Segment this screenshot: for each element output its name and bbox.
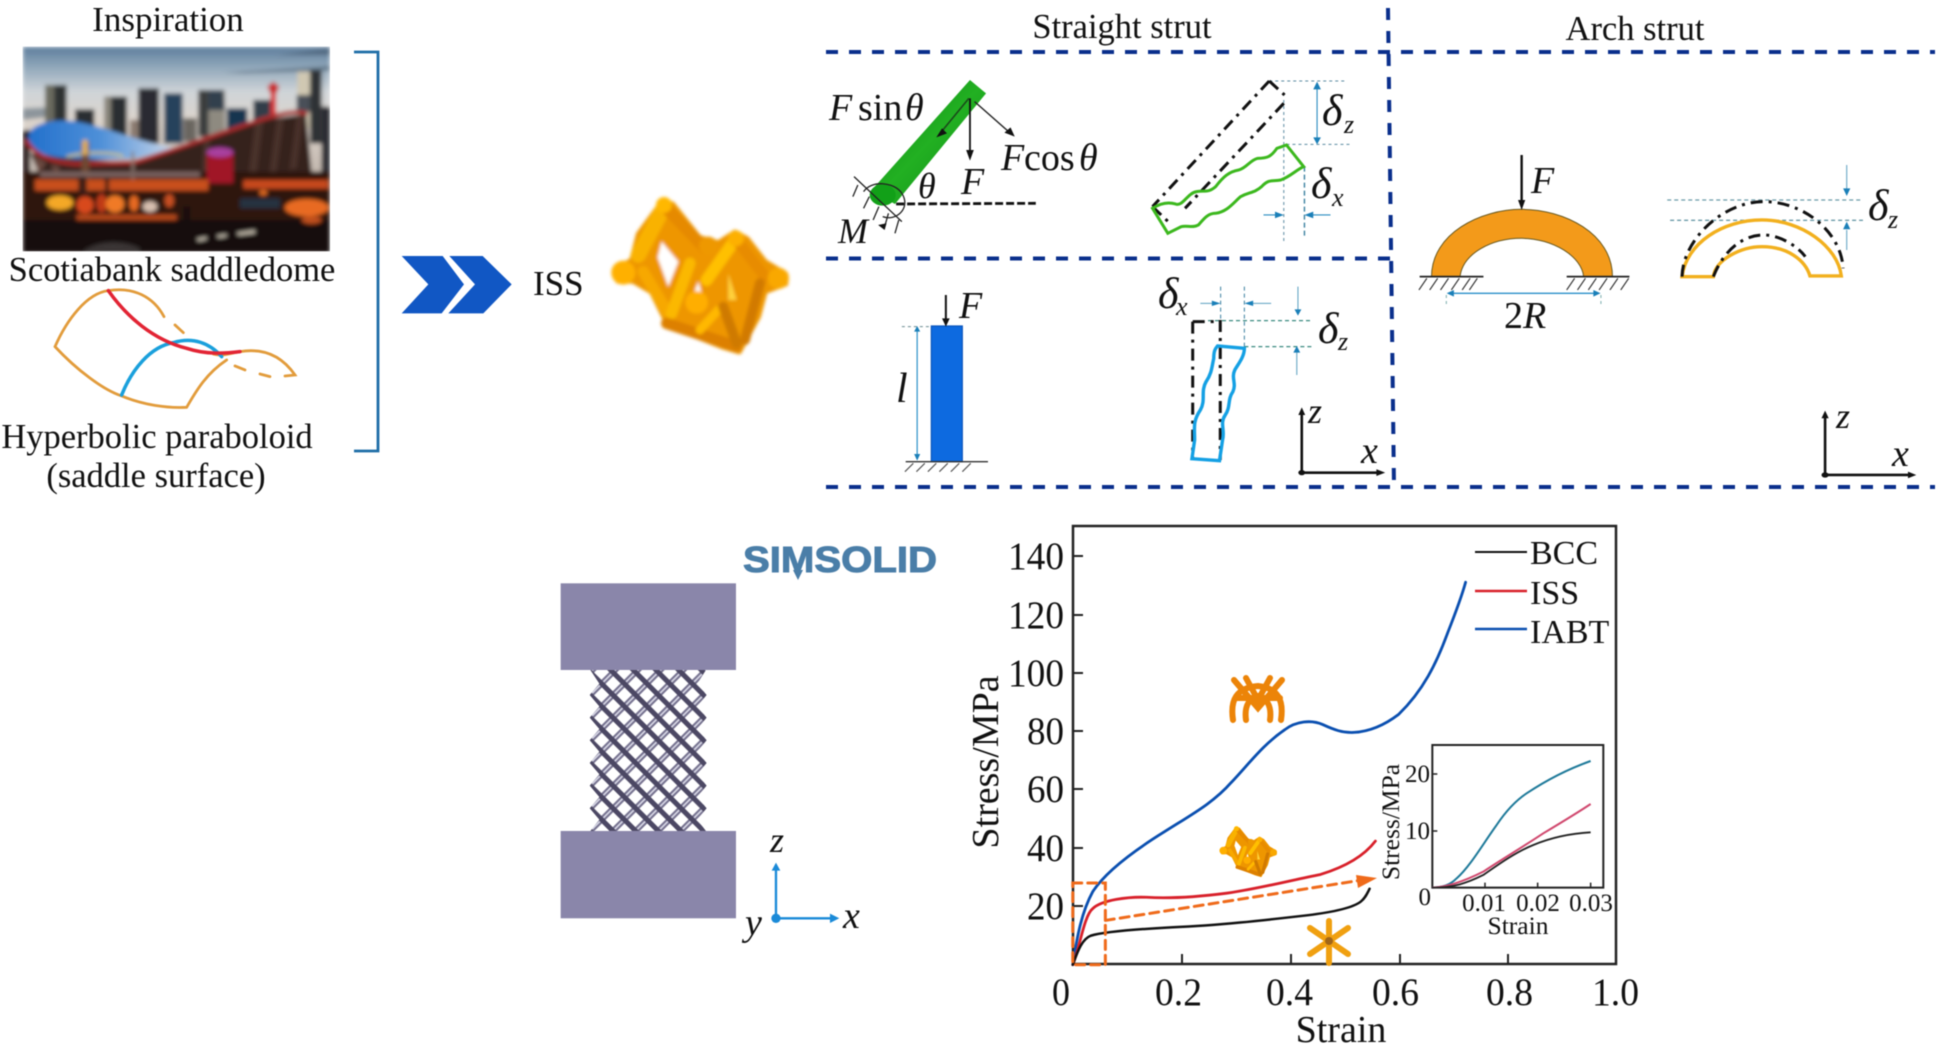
label: F: F	[958, 285, 983, 327]
inset tick labels: 20	[1405, 761, 1430, 788]
inset tick labels: 0	[1418, 884, 1431, 911]
caption: Scotiabank saddledome: Scotiabank saddledome	[9, 251, 335, 289]
diagram: lattice compression simulation	[561, 583, 736, 918]
inset tick labels: 0.03	[1569, 890, 1613, 917]
diagram: blue vertical strut	[902, 295, 988, 472]
inset y title: Stress/MPa	[1376, 764, 1405, 880]
label: F sin theta: F	[828, 87, 853, 129]
diagram: deformed vertical strut	[1192, 287, 1313, 461]
caption: Hyperbolic paraboloid (saddle surface)	[1, 418, 313, 495]
y axis tick labels: 60	[1027, 768, 1064, 811]
label: M: M	[837, 211, 870, 251]
plot frame and ticks	[1073, 526, 1616, 964]
label: 2R: 2R	[1504, 295, 1546, 337]
inset frame and ticks	[1432, 745, 1603, 888]
label: F sin theta: sin	[858, 87, 902, 129]
axes: z-x	[1298, 407, 1385, 476]
panel: straight strut, inclined	[828, 80, 1354, 251]
label: delta x: δ	[1311, 159, 1333, 208]
dashed frames	[826, 8, 1935, 487]
icon: ISS lattice unit cell	[611, 197, 789, 352]
label: x: x	[842, 895, 860, 937]
curves	[1073, 582, 1466, 965]
inset tick labels: 10	[1405, 818, 1430, 845]
logo: SIMSOLID: SIMSOLID	[743, 539, 937, 580]
curve: BCC	[1073, 889, 1370, 965]
caption: Hyperbolic paraboloid (saddle surface): (saddle surface)	[46, 457, 266, 495]
icon: BCC cell	[1310, 921, 1348, 963]
inset x title: Strain	[1488, 911, 1549, 940]
x axis tick labels: 0.2	[1155, 971, 1202, 1014]
x axis tick labels: 0.8	[1486, 971, 1533, 1014]
bottom platen	[561, 831, 736, 918]
y axis tick labels: 120	[1008, 594, 1064, 637]
label: z: z	[1835, 396, 1850, 436]
icon: saddle surface sketch	[55, 290, 295, 407]
label: delta z: z	[1887, 205, 1898, 234]
label: ISS: ISS	[533, 264, 584, 303]
inset tick labels: 0.01	[1462, 890, 1506, 917]
heading: Inspiration: Inspiration	[92, 0, 244, 39]
lattice specimen	[588, 670, 708, 831]
label: z: z	[769, 820, 784, 860]
axes: z-x-y blue	[771, 863, 839, 923]
y axis tick labels: 140	[1008, 535, 1064, 578]
x axis tick labels: 0	[1052, 971, 1070, 1014]
diagram: deformed arch	[1667, 165, 1863, 277]
x axis tick labels: 1.0	[1592, 971, 1639, 1014]
label: x: x	[1891, 433, 1909, 475]
bracket	[354, 52, 378, 451]
arrowhead	[1356, 875, 1377, 888]
inset tick labels: 0.02	[1516, 890, 1560, 917]
label: delta z: δ	[1322, 86, 1344, 135]
curve: IABT	[1073, 582, 1466, 965]
inset tick labels	[1405, 761, 1613, 917]
label: delta x: δ	[1158, 269, 1180, 318]
panel: straight strut, vertical	[896, 269, 1385, 476]
inset curve: IABT	[1432, 761, 1591, 888]
label: delta z: δ	[1318, 304, 1340, 353]
label: F cos theta: θ	[1079, 137, 1098, 179]
label: delta z: δ	[1868, 181, 1890, 230]
x axis tick labels: 0.6	[1372, 971, 1419, 1014]
heading: Arch strut: Arch strut	[1566, 10, 1705, 48]
icon: IABT cell	[1232, 678, 1282, 720]
y axis tick labels: 100	[1008, 652, 1064, 695]
legend: BCC	[1530, 535, 1598, 572]
inset curve: ISS	[1432, 804, 1591, 888]
label: delta x: x	[1175, 292, 1188, 321]
y axis tick labels: 80	[1027, 710, 1064, 753]
diagram: orange arch with load	[1419, 155, 1629, 307]
label: y: y	[741, 902, 762, 944]
label: z: z	[1307, 391, 1322, 431]
x axis tick labels	[1052, 971, 1639, 1014]
label: delta z: z	[1343, 110, 1354, 139]
y axis tick labels: 40	[1027, 827, 1064, 870]
label: theta: θ	[918, 166, 936, 206]
legend	[1475, 535, 1610, 651]
arrow: double chevron	[402, 256, 512, 313]
label: x: x	[1360, 430, 1378, 472]
y axis title: Stress/MPa	[965, 675, 1007, 849]
x axis tick labels: 0.4	[1266, 971, 1313, 1014]
diagram: green strut with forces	[853, 80, 1036, 233]
label: F: F	[1530, 160, 1555, 202]
label: F: F	[960, 161, 985, 203]
curve: ISS	[1073, 841, 1375, 965]
label: F sin theta: θ	[905, 87, 924, 129]
top platen	[561, 583, 736, 670]
legend: ISS	[1530, 575, 1579, 612]
panel: arch strut	[1419, 155, 1916, 478]
label: delta x: x	[1331, 183, 1344, 212]
y axis tick labels	[1008, 535, 1064, 928]
icon: ISS cell	[1219, 826, 1277, 876]
axes: z-x	[1821, 411, 1916, 478]
legend: IABT	[1530, 614, 1610, 651]
label: F cos theta: F	[1000, 137, 1025, 179]
photo: Scotiabank saddledome	[23, 47, 330, 253]
heading: Straight strut: Straight strut	[1032, 8, 1212, 46]
label: F cos theta: cos	[1024, 137, 1075, 179]
y axis tick labels: 20	[1027, 885, 1064, 928]
inset curve: BCC	[1432, 832, 1591, 888]
inset chart	[1376, 745, 1613, 940]
label: l: l	[896, 366, 908, 412]
chart: stress-strain	[965, 526, 1639, 1044]
caption: Hyperbolic paraboloid (saddle surface): Hyperbolic paraboloid	[1, 418, 313, 456]
zoom region and dashed arrow	[1073, 881, 1358, 965]
diagram: deformed inclined strut	[1153, 81, 1350, 242]
label: delta z: z	[1337, 327, 1348, 356]
